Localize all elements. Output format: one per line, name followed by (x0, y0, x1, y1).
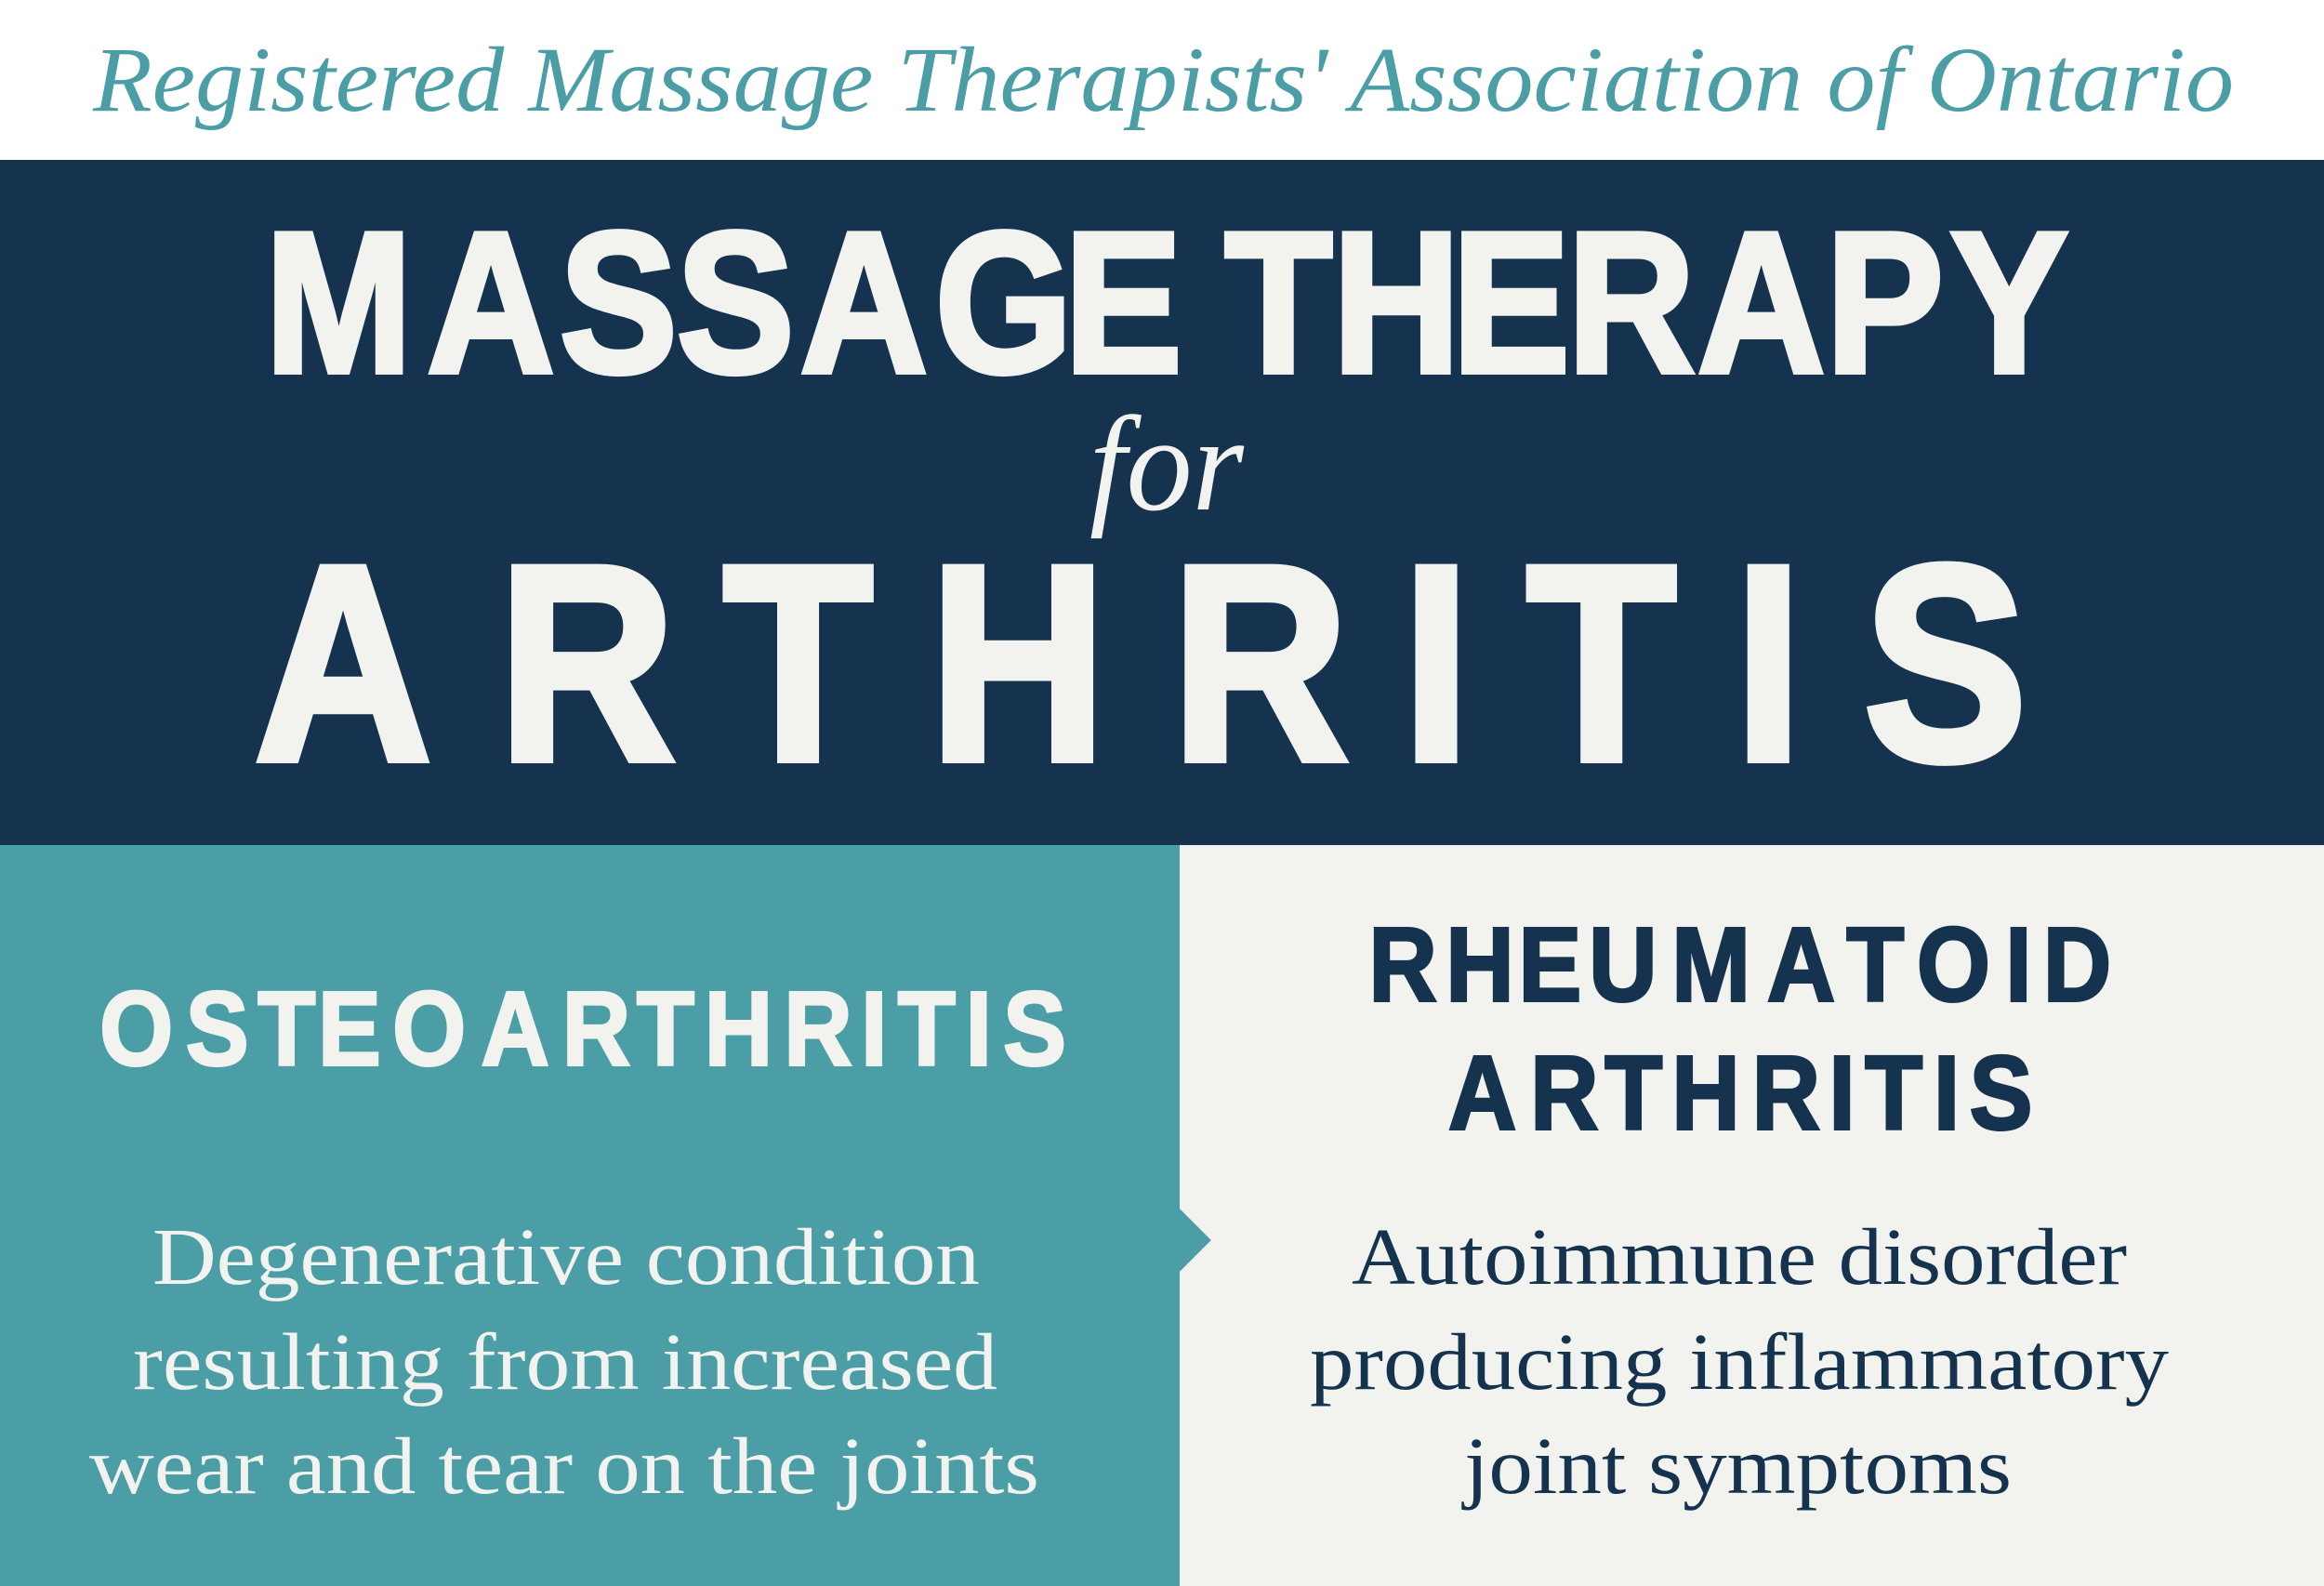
heading: association name: Registered Massage Therapists' Association of Ontario (92, 28, 2234, 131)
heading: rheumatoid arthritis: ARTHRITIS (1448, 1035, 2032, 1152)
heading: rheumatoid arthritis (1368, 906, 2111, 1152)
text: rheumatoid description (1310, 1211, 2170, 1511)
heading: osteoarthritis: OSTEOARTHRITIS (99, 971, 1066, 1088)
panel: osteoarthritis (0, 845, 1211, 1586)
title: arthritis: ARTHRITIS (255, 507, 2027, 819)
panel: title block (0, 160, 2324, 845)
title: massage therapy: MASSAGE THERAPY (265, 192, 2068, 416)
text: osteoarthritis description: resulting from increased (133, 1316, 997, 1407)
heading: rheumatoid arthritis: RHEUMATOID (1368, 906, 2111, 1024)
panel: rheumatoid arthritis (1180, 845, 2324, 1586)
text: rheumatoid description: producing inflammatory (1310, 1316, 2170, 1407)
text: osteoarthritis description (89, 1211, 1039, 1511)
title: for: for (1089, 389, 1245, 539)
text: osteoarthritis description: Degenerative condition (152, 1211, 980, 1302)
text: osteoarthritis description: wear and tear on the joints (89, 1421, 1039, 1511)
text: rheumatoid description: Autoimmune disorder (1352, 1211, 2127, 1302)
panel: header band (0, 0, 2324, 160)
text: rheumatoid description: joint symptoms (1461, 1421, 2012, 1511)
